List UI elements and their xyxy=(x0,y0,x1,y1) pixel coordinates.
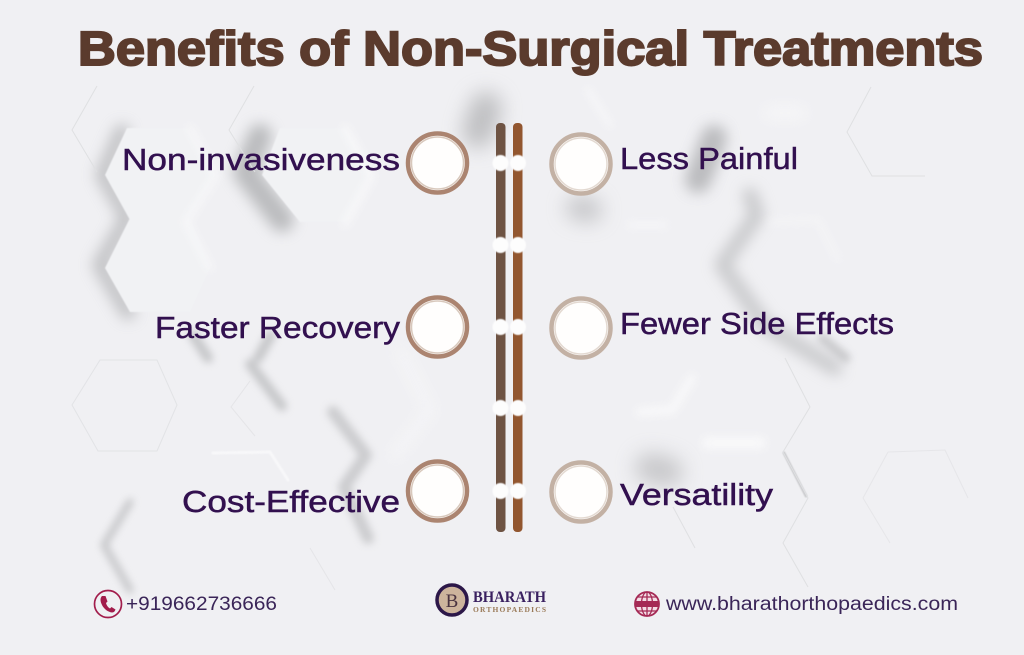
title: Benefits of Non-Surgical Treatments xyxy=(78,23,983,76)
website url: www.bharathorthopaedics.com xyxy=(665,594,958,615)
phone number: +919662736666 xyxy=(126,594,277,615)
label: faster recovery: Faster Recovery xyxy=(155,310,401,345)
footer: website xyxy=(635,592,958,616)
logo subtitle: ORTHOPAEDICS xyxy=(473,605,546,614)
white highlights xyxy=(186,90,838,480)
marker: faster recovery xyxy=(408,298,467,356)
label: less painful: Less Painful xyxy=(620,141,798,176)
central twin bars xyxy=(492,123,526,532)
soft shadows xyxy=(100,108,846,590)
marker: fewer side effects xyxy=(552,298,610,358)
left circle markers xyxy=(408,134,467,520)
thin outlines xyxy=(72,86,968,590)
footer: phone xyxy=(94,590,277,618)
label: cost-effective: Cost-Effective xyxy=(182,484,400,519)
marker: less painful xyxy=(552,134,610,194)
footer: logo xyxy=(437,585,547,615)
label: versatility: Versatility xyxy=(620,477,774,512)
icon: globe xyxy=(635,592,659,616)
label: fewer side effects: Fewer Side Effects xyxy=(620,306,894,341)
connector dots xyxy=(492,155,526,499)
marker: versatility xyxy=(552,462,610,522)
marker: cost-effective xyxy=(408,462,467,520)
logo emblem: B xyxy=(446,591,458,612)
marker: non-invasiveness xyxy=(408,134,467,192)
logo wordmark: BHARATH xyxy=(473,589,547,606)
icon: phone xyxy=(94,590,122,618)
hexagon faces xyxy=(105,128,370,312)
right circle markers xyxy=(552,134,610,522)
label: non-invasiveness: Non-invasiveness xyxy=(122,142,400,177)
benefit labels xyxy=(122,141,894,519)
